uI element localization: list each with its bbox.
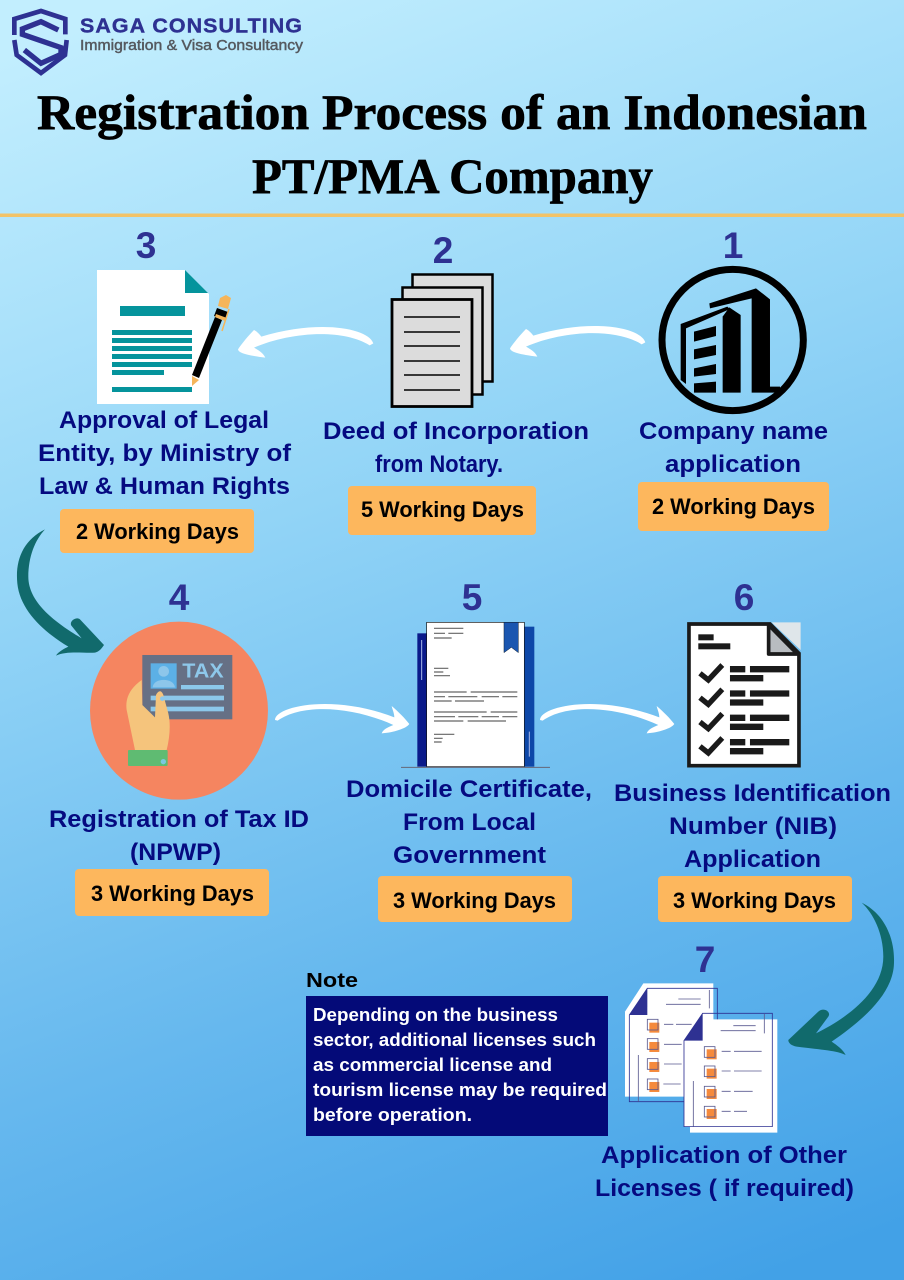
arrow: step 3 to step 4 bbox=[17, 529, 104, 656]
step 3 label: Law & Human Rights bbox=[39, 473, 290, 500]
icon: checklist document bbox=[689, 622, 801, 766]
step 1 duration badge bbox=[638, 482, 829, 531]
icon: document with pen bbox=[97, 270, 231, 404]
step 5 duration badge: 3 Working Days bbox=[393, 888, 556, 913]
title: Registration Process of an Indonesian bbox=[37, 84, 867, 140]
step 5 label: From Local bbox=[403, 809, 536, 836]
logo tagline: Immigration & Visa Consultancy bbox=[80, 38, 304, 54]
step 4 label: (NPWP) bbox=[130, 839, 221, 866]
step 6 label bbox=[614, 780, 891, 873]
step 6: business identification number bbox=[614, 577, 891, 922]
step 7 label: Application of Other bbox=[601, 1142, 847, 1169]
step 3 label: Entity, by Ministry of bbox=[38, 440, 292, 467]
arrow: step 2 to step 3 bbox=[238, 327, 373, 358]
step 4 duration badge: 3 Working Days bbox=[91, 881, 254, 906]
step 1: company name application bbox=[638, 225, 829, 531]
step number 3: 3 bbox=[136, 225, 156, 266]
step 6 duration badge: 3 Working Days bbox=[673, 888, 836, 913]
logo bbox=[14, 11, 304, 73]
step 3 label: Approval of Legal bbox=[59, 407, 269, 434]
note heading: Note bbox=[306, 969, 358, 992]
icon: office building bbox=[662, 269, 803, 411]
logo name: SAGA CONSULTING bbox=[80, 14, 303, 38]
arrow: step 5 to step 6 bbox=[540, 704, 674, 733]
logo shield icon bbox=[14, 11, 67, 73]
arrow: step 1 to step 2 bbox=[510, 326, 645, 357]
note text: sector, additional licenses such bbox=[313, 1030, 596, 1050]
icon: stacked documents bbox=[392, 274, 492, 406]
step 3: approval of legal entity bbox=[38, 225, 292, 553]
step 4 label: Registration of Tax ID bbox=[49, 806, 309, 833]
step number 1: 1 bbox=[723, 225, 743, 266]
step 7 label: Licenses ( if required) bbox=[595, 1175, 854, 1202]
step 5 label: Government bbox=[393, 842, 546, 869]
title bbox=[37, 84, 867, 204]
step 6 label: Business Identification bbox=[614, 780, 891, 807]
icon: hand holding tax card: TAX bbox=[182, 661, 224, 683]
arrow: step 6 to step 7 bbox=[788, 903, 894, 1055]
step 4 label bbox=[49, 806, 309, 866]
step 1 label bbox=[639, 418, 828, 478]
arrow: step 4 to step 5 bbox=[275, 704, 409, 733]
note text: tourism license may be required bbox=[313, 1080, 607, 1100]
step 2 label bbox=[323, 418, 589, 478]
step number 2: 2 bbox=[433, 230, 453, 271]
step 5: domicile certificate bbox=[346, 577, 592, 922]
step 6 duration badge bbox=[658, 876, 852, 922]
step 3 duration badge: 2 Working Days bbox=[76, 519, 239, 544]
step 2 duration badge: 5 Working Days bbox=[361, 497, 524, 522]
note text: as commercial license and bbox=[313, 1055, 552, 1075]
step 5 label: Domicile Certificate, bbox=[346, 776, 592, 803]
note box bbox=[306, 996, 608, 1136]
icon: hand holding tax card bbox=[90, 622, 268, 800]
step 3 label bbox=[38, 407, 292, 500]
step 7 label bbox=[595, 1142, 854, 1202]
note text: before operation. bbox=[313, 1105, 472, 1125]
title: PT/PMA Company bbox=[252, 148, 653, 204]
note text bbox=[313, 1005, 607, 1125]
step 4: tax id registration bbox=[49, 577, 309, 916]
step 3 duration badge bbox=[60, 509, 254, 553]
icon: certificate document bbox=[401, 622, 550, 767]
step number 4: 4 bbox=[169, 577, 190, 618]
step 7: other licenses bbox=[595, 939, 854, 1202]
step 5 duration badge bbox=[378, 876, 572, 922]
note bbox=[306, 969, 608, 1136]
step 2 label: Deed of Incorporation bbox=[323, 418, 589, 445]
step 5 label bbox=[346, 776, 592, 869]
icon: two checklist documents bbox=[625, 983, 777, 1133]
step 2 label: from Notary. bbox=[375, 451, 503, 478]
step number 5: 5 bbox=[462, 577, 482, 618]
step number 6: 6 bbox=[734, 577, 754, 618]
step 6 label: Application bbox=[684, 846, 821, 873]
step 1 label: application bbox=[665, 451, 801, 478]
step 2: deed of incorporation bbox=[323, 230, 589, 535]
step 1 duration badge: 2 Working Days bbox=[652, 494, 815, 519]
step 4 duration badge bbox=[75, 869, 269, 916]
step 2 duration badge bbox=[348, 486, 536, 535]
note text: Depending on the business bbox=[313, 1005, 558, 1025]
step number 7: 7 bbox=[695, 939, 715, 980]
step 6 label: Number (NIB) bbox=[669, 813, 837, 840]
step 1 label: Company name bbox=[639, 418, 828, 445]
